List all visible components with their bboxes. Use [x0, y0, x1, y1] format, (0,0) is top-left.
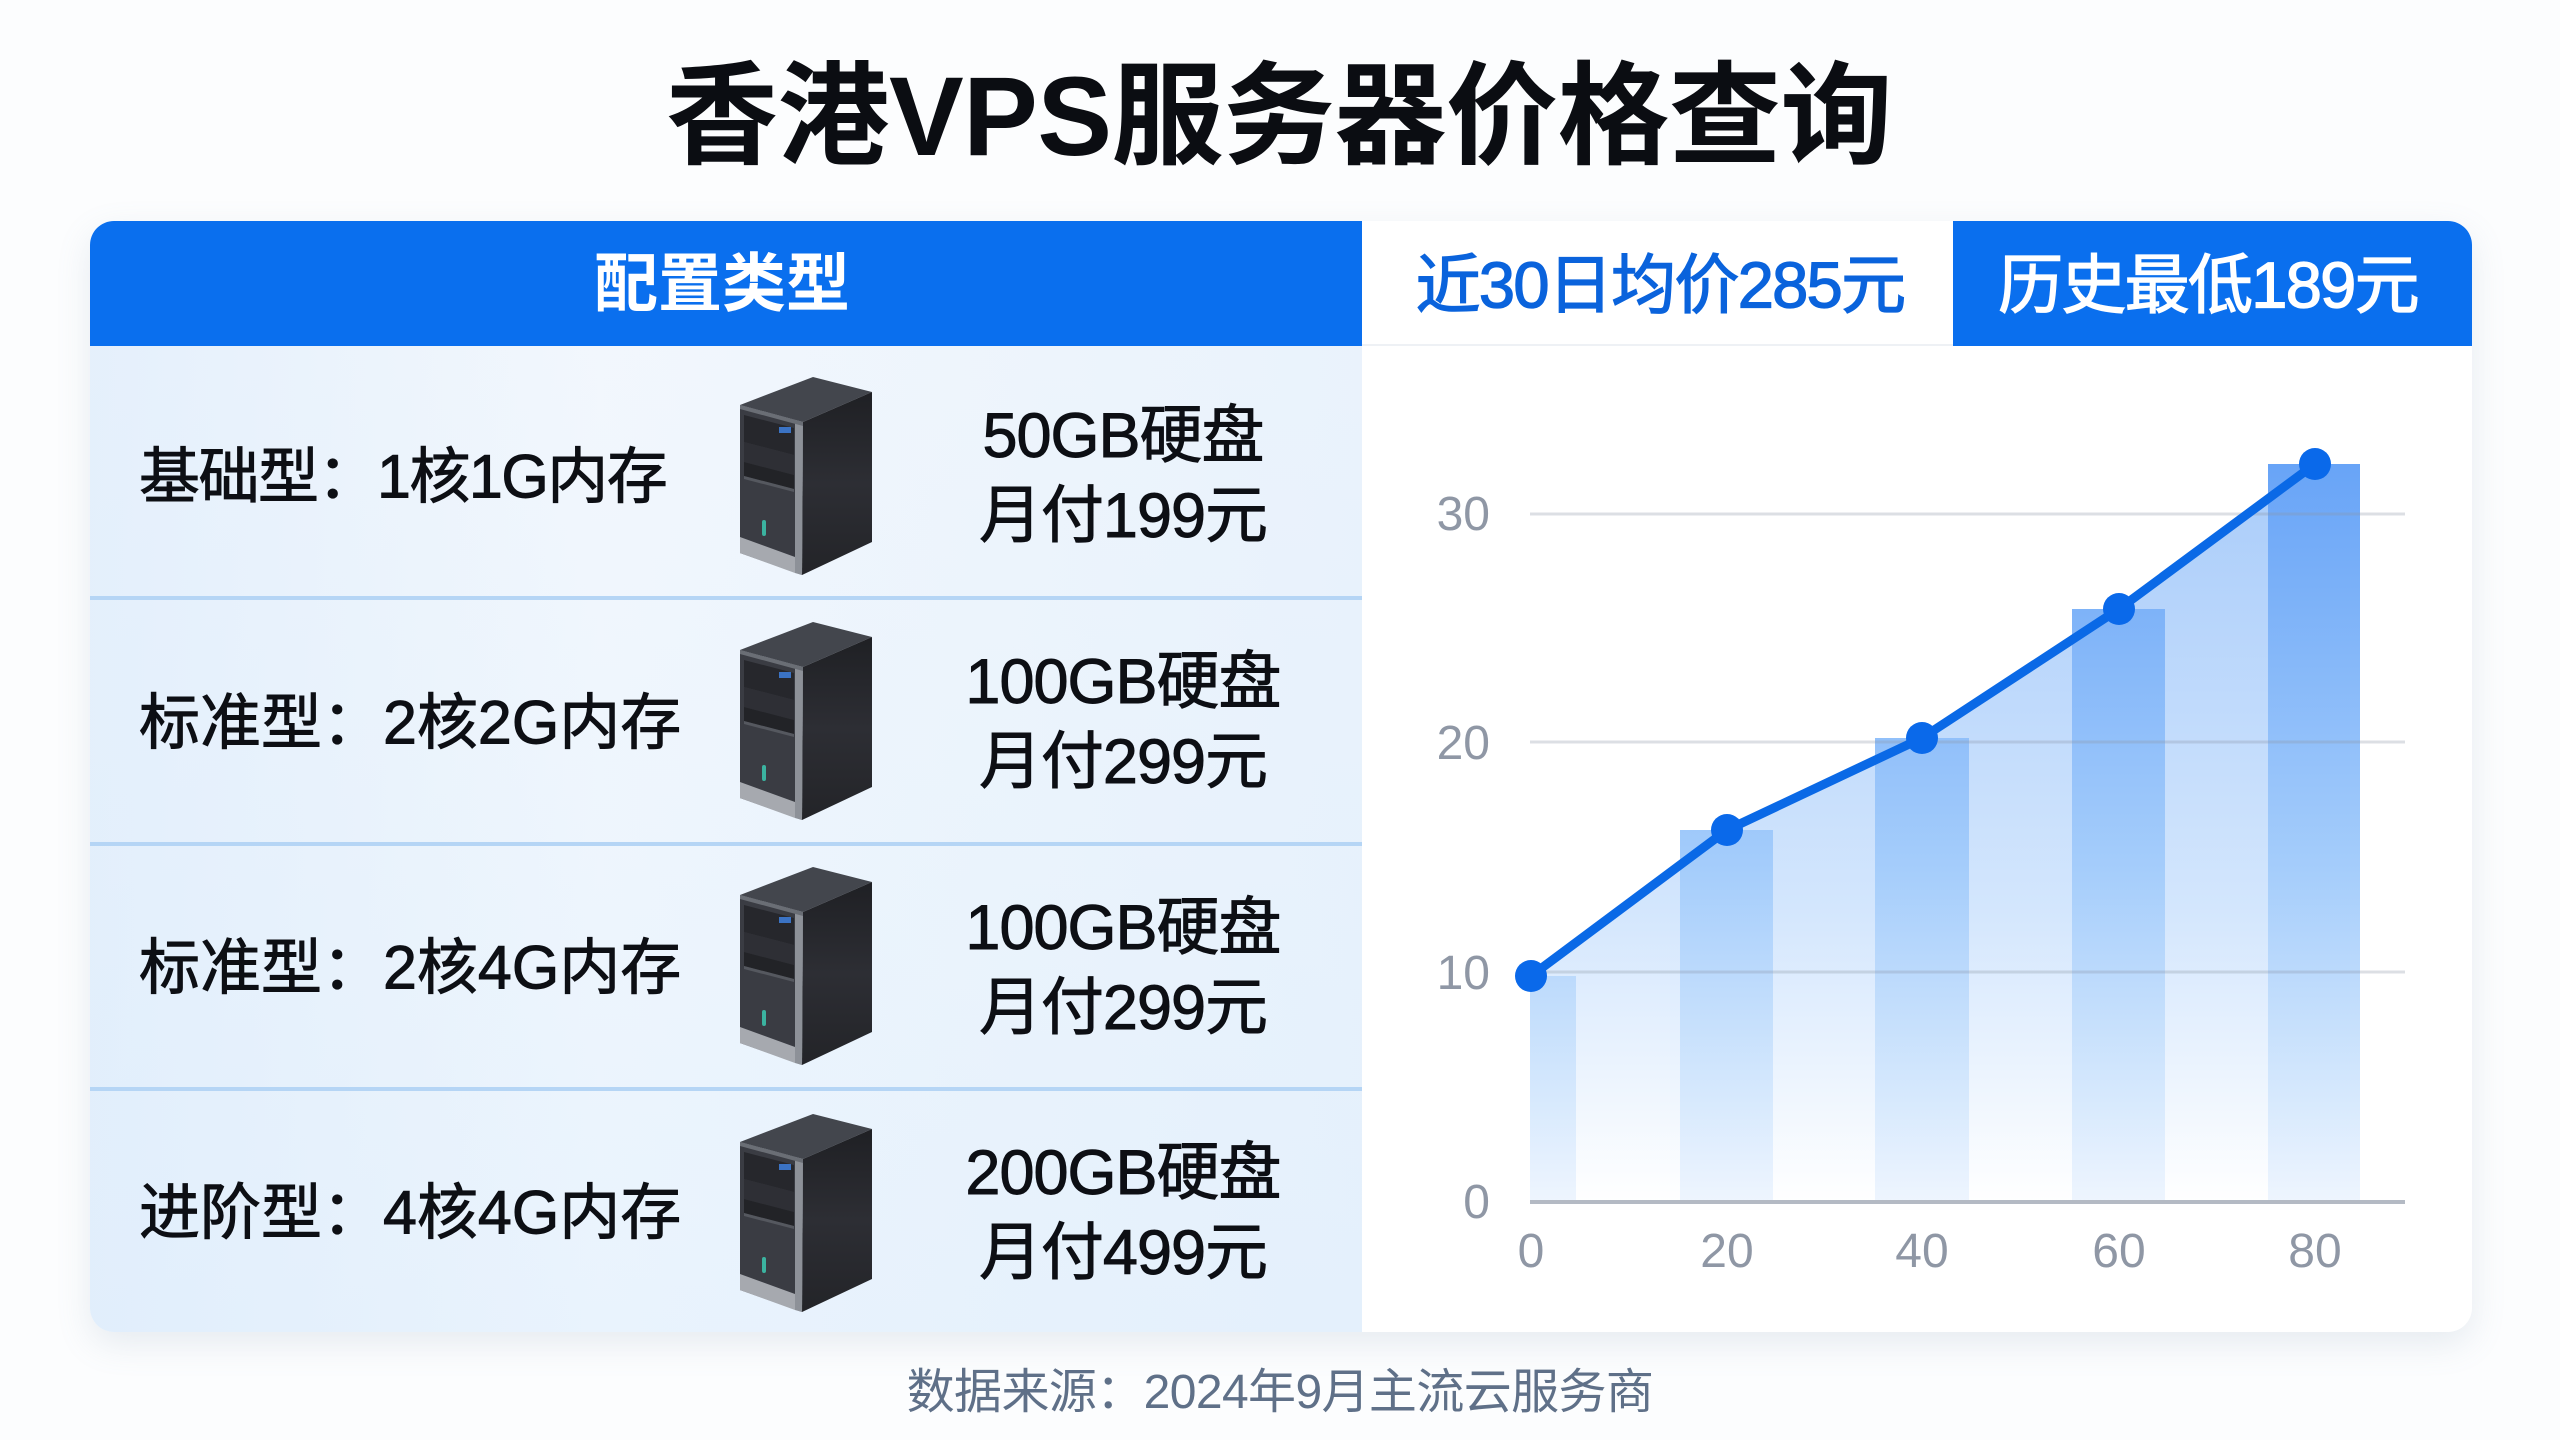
average price text: 近30日均价285元 — [1416, 248, 1904, 322]
header text: configuration type: 配置类型 — [594, 248, 850, 320]
area under trend line — [1531, 464, 2360, 1202]
y axis labels: 0 — [1463, 1176, 1490, 1229]
row 3 label: 标准型：2核4G内存 — [139, 934, 681, 1002]
row 3 disk and price: 月付299元 — [979, 973, 1267, 1043]
row 3: standard 4G — [139, 867, 1281, 1065]
panel: configuration rows — [90, 346, 1362, 1332]
title: 香港VPS服务器价格查询 — [666, 54, 1892, 179]
x axis labels: 60 — [2092, 1225, 2146, 1278]
row 2 disk and price: 月付299元 — [979, 727, 1267, 797]
header: configuration type — [90, 221, 1362, 346]
x axis labels: 80 — [2288, 1225, 2342, 1278]
row 4 disk and price: 200GB硬盘 — [965, 1138, 1281, 1208]
row 2 icon: server tower — [740, 622, 872, 820]
x axis labels: 40 — [1895, 1225, 1949, 1278]
data points — [1515, 448, 2331, 992]
row 4: advanced — [139, 1114, 1281, 1312]
x axis labels — [1518, 1225, 2342, 1278]
row 1: basic — [139, 377, 1267, 575]
panel: price table card — [90, 221, 2472, 1332]
row 1 disk and price — [979, 401, 1267, 551]
y axis labels: 20 — [1437, 717, 1490, 770]
row 1 label: 基础型：1核1G内存 — [139, 442, 666, 510]
row 4 icon: server tower — [740, 1114, 872, 1312]
row 4 disk and price — [965, 1138, 1281, 1288]
row 2 disk and price — [965, 647, 1281, 797]
row 2 label: 标准型：2核2G内存 — [139, 688, 681, 756]
x axis labels: 0 — [1518, 1225, 1544, 1278]
row 1 icon: server tower — [740, 377, 872, 575]
row 2: standard 2G — [139, 622, 1281, 820]
row 4 label: 进阶型：4核4G内存 — [139, 1178, 681, 1246]
y axis labels: 10 — [1437, 947, 1490, 1000]
row 3 disk and price: 100GB硬盘 — [965, 893, 1281, 963]
row 3 disk and price — [965, 893, 1281, 1043]
header: historic low price — [1953, 221, 2472, 346]
chart: price trend — [1437, 448, 2405, 1278]
header: 30-day average price — [1362, 221, 1953, 346]
x axis labels: 20 — [1700, 1225, 1754, 1278]
row 3 icon: server tower — [740, 867, 872, 1065]
row 1 disk and price: 50GB硬盘 — [982, 401, 1264, 471]
row 4 disk and price: 月付499元 — [979, 1218, 1267, 1288]
y axis labels — [1437, 488, 1490, 1229]
x axis — [1530, 1200, 2405, 1204]
historic low text: 历史最低189元 — [1998, 248, 2418, 322]
row 2 disk and price: 100GB硬盘 — [965, 647, 1281, 717]
y axis labels: 30 — [1437, 488, 1490, 541]
trend line — [1531, 464, 2315, 976]
footer: data source: 数据来源：2024年9月主流云服务商 — [907, 1366, 1653, 1419]
bars — [1530, 464, 2360, 1202]
row 1 disk and price: 月付199元 — [979, 481, 1267, 551]
grid lines — [1530, 514, 2405, 972]
